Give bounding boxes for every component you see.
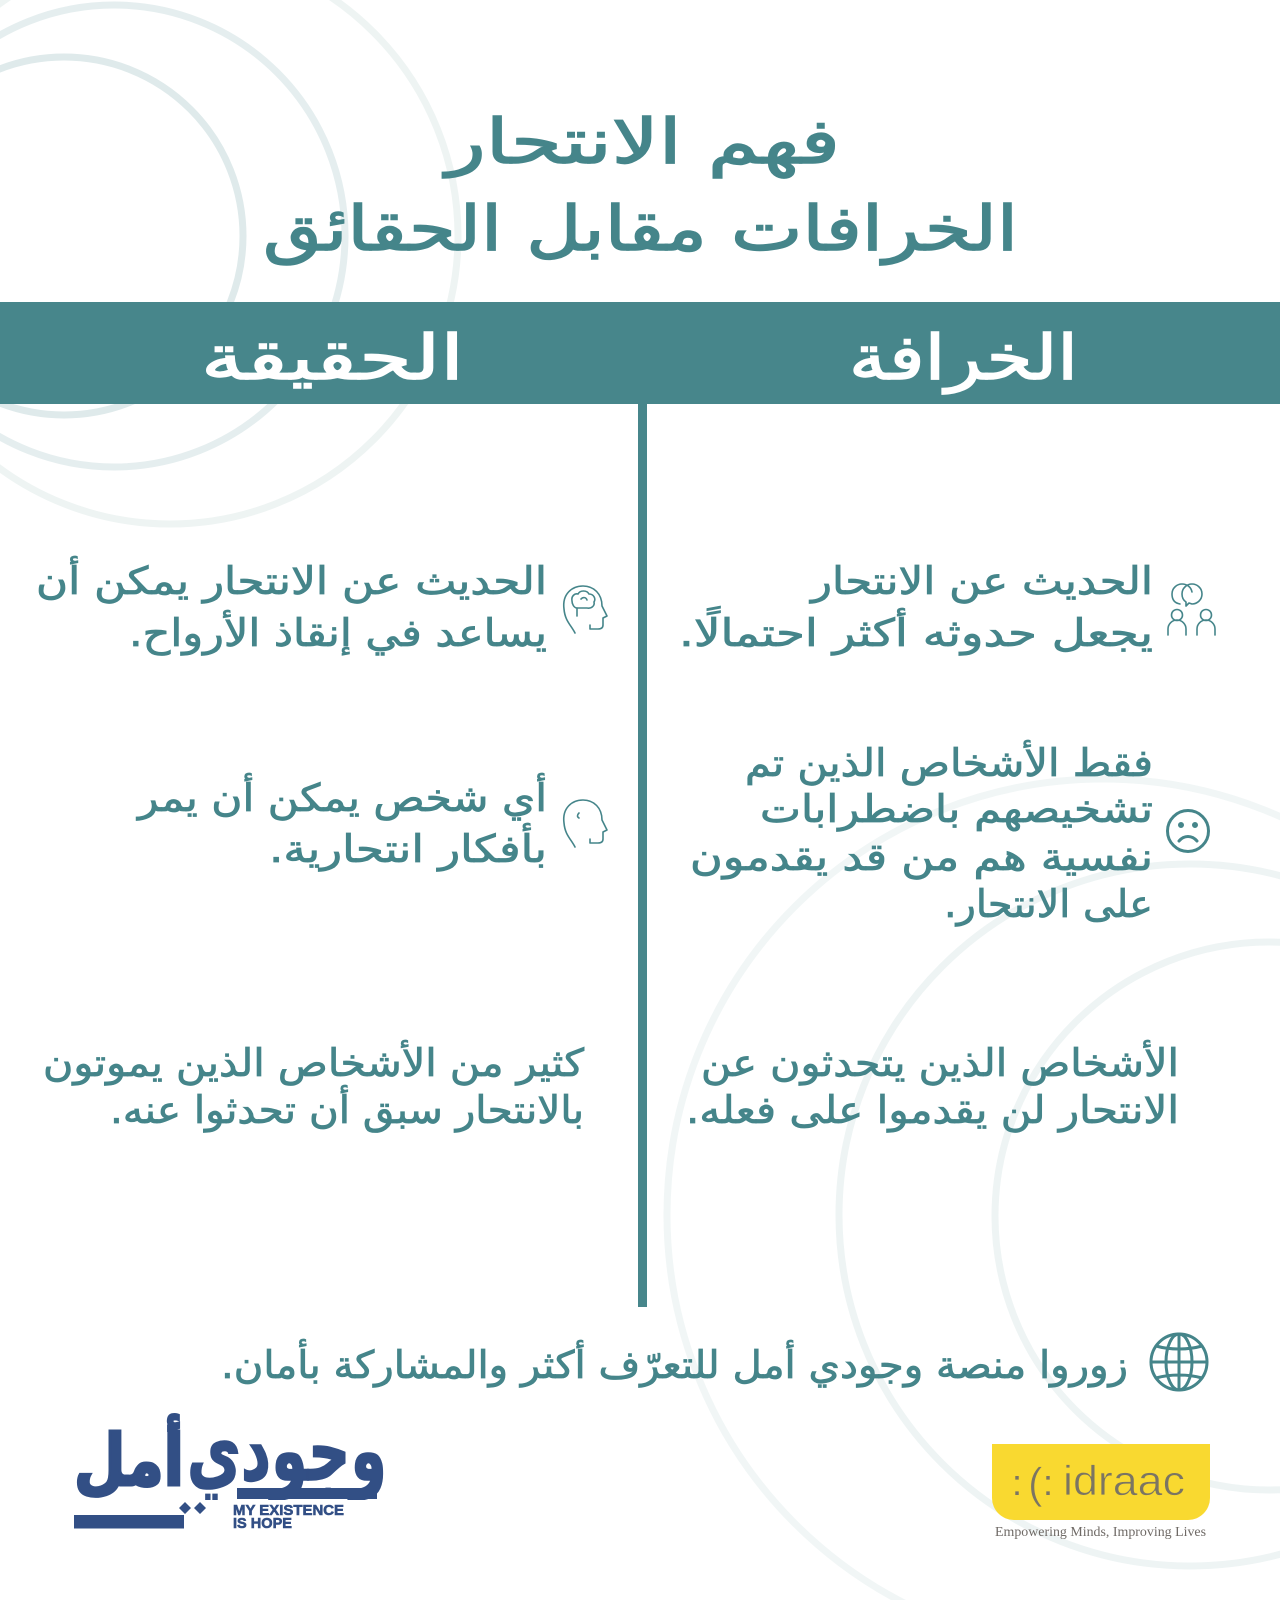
logo: my existence is hope: وجودي xyxy=(187,1402,387,1501)
logo: my existence is hope: IS HOPE xyxy=(233,1515,292,1532)
logo: idraac: : xyxy=(1012,1462,1022,1503)
fact 1 text: الحديث عن الانتحار يمكن أن xyxy=(36,556,547,604)
fact 3 text xyxy=(43,1039,585,1133)
myth 1 text: الحديث عن الانتحار xyxy=(809,559,1153,604)
title xyxy=(263,105,1018,265)
icon: head with brain xyxy=(564,586,607,633)
heading: myth: الخرافة xyxy=(849,321,1078,394)
fact 2 text: بأفكار انتحارية. xyxy=(269,823,547,871)
myth 2 text: على الانتحار. xyxy=(944,882,1153,926)
icon: sad face xyxy=(1168,810,1208,852)
fact 3 text: كثير من الأشخاص الذين يموتون xyxy=(43,1039,585,1086)
fact 1 text: يساعد في إنقاذ الأرواح. xyxy=(129,609,547,656)
heading: fact: الحقيقة xyxy=(201,321,464,394)
icon: globe xyxy=(1151,1334,1207,1390)
myth 2 text: فقط الأشخاص الذين تم xyxy=(745,739,1153,786)
myth 2 text xyxy=(690,739,1153,926)
icon: head outline xyxy=(564,800,607,847)
myth 1 text xyxy=(679,559,1153,656)
fact 1 text xyxy=(36,556,547,656)
header band xyxy=(0,302,1280,404)
logo: my existence is hope xyxy=(74,1413,384,1528)
title: الخرافات مقابل الحقائق xyxy=(263,192,1018,265)
logo: idraac: : xyxy=(1043,1462,1053,1503)
myth 2 text: نفسية هم من قد يقدمون xyxy=(690,835,1153,880)
myth 2 text: تشخيصهم باضطرابات xyxy=(760,787,1153,832)
icon: people talking xyxy=(1168,584,1215,635)
tagline: Empowering Minds, Improving Lives xyxy=(995,1525,1206,1540)
center divider xyxy=(638,404,647,1307)
title: فهم الانتحار xyxy=(442,105,840,179)
myth 3 text: الانتحار لن يقدموا على فعله. xyxy=(686,1088,1179,1133)
myth 1 text: يجعل حدوثه أكثر احتمالًا. xyxy=(679,606,1153,656)
fact 3 text: بالانتحار سبق أن تحدثوا عنه. xyxy=(110,1085,584,1133)
logo: idraac: ( xyxy=(1028,1459,1043,1508)
myth 3 text: الأشخاص الذين يتحدثون عن xyxy=(701,1039,1179,1086)
fact 2 text xyxy=(136,773,547,871)
fact 2 text: أي شخص يمكن أن يمر xyxy=(136,773,547,821)
logo: idraac: idraac xyxy=(1063,1457,1185,1504)
logo: my existence is hope: أمل xyxy=(74,1414,184,1502)
logo: idraac xyxy=(992,1444,1210,1540)
logo: my existence is hope: MY EXISTENCE xyxy=(233,1502,344,1519)
myth 3 text xyxy=(686,1039,1179,1133)
footer call to action: زوروا منصة وجودي أمل للتعرّف أكثر والمشاركة بأمان. xyxy=(221,1339,1128,1388)
